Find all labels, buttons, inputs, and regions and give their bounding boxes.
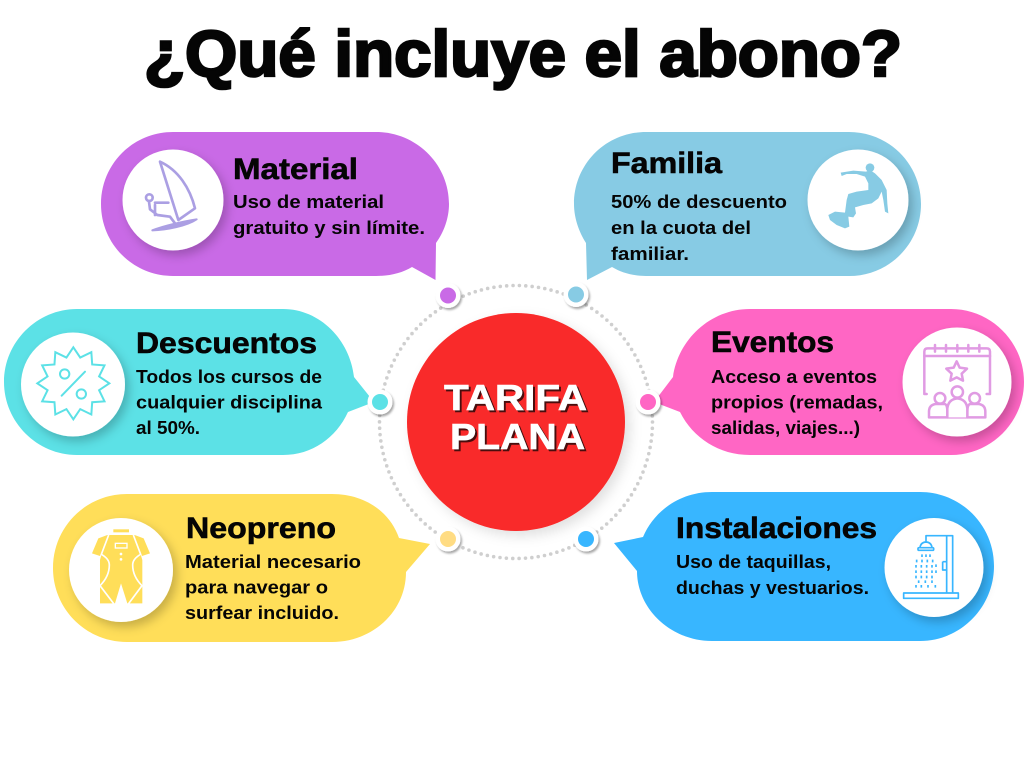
text: familia description: familiar. [611,244,689,264]
central label: PLANA [450,416,585,457]
panel: familia [574,132,921,280]
text: neopreno description: Material necesario [185,552,361,572]
icon: calendar and people [902,328,1012,436]
heading: neopreno: Neopreno [186,512,336,545]
text: eventos description: Acceso a eventos [711,367,877,387]
text: material description: gratuito y sin límite. [233,218,425,238]
heading: familia: Familia [611,147,722,180]
panel: instalaciones [614,492,994,641]
text: eventos description [711,367,883,438]
bubble: material [101,132,449,280]
text: familia description: 50% de descuento [611,192,787,212]
bubble: neopreno [53,494,430,642]
text: instalaciones description [676,552,869,598]
heading: instalaciones: Instalaciones [676,512,877,545]
central circle: tarifa plana [407,313,625,531]
heading: eventos: Eventos [711,326,834,359]
icon: surfer [808,150,908,250]
icon: wetsuit [69,518,173,622]
icon: windsurfer [122,150,224,250]
text: material description: Uso de material [233,192,384,212]
panel: eventos [654,309,1024,455]
dotted ring [380,286,652,558]
central label: TARIFA [444,377,587,418]
bubble: instalaciones [614,492,994,641]
connector dot: eventos [636,390,660,414]
text: eventos description: salidas, viajes...) [711,418,860,438]
bubble: familia [574,132,921,280]
text: descuentos description: cualquier disciplina [136,392,323,412]
heading: descuentos: Descuentos [136,327,317,360]
text: neopreno description: surfear incluido. [185,603,339,623]
central label [444,377,587,457]
text: eventos description: propios (remadas, [711,392,883,412]
text: familia description [611,192,787,264]
panel: neopreno [53,494,430,642]
title: ¿Qué incluye el abono? [144,17,902,90]
connector dot: familia [564,282,588,307]
text: neopreno description: para navegar o [185,578,328,598]
text: neopreno description [185,552,361,623]
text: descuentos description: al 50%. [136,418,200,438]
panel: material [101,132,449,280]
heading: material: Material [233,153,358,186]
connector dot: neopreno [436,526,460,552]
icon: discount badge [21,332,125,436]
panel: descuentos [4,309,374,455]
bubble: descuentos [4,309,374,455]
text: familia description: en la cuota del [611,218,751,238]
connector dot: instalaciones [574,526,598,552]
text: material description [233,192,425,238]
text: instalaciones description: duchas y vestuarios. [676,578,869,598]
connector dot: descuentos [368,390,392,414]
connector dot: material [436,283,460,308]
icon: shower [884,518,984,617]
text: descuentos description: Todos los cursos de [136,367,322,387]
text: descuentos description [136,367,323,438]
text: instalaciones description: Uso de taquillas, [676,552,831,572]
bubble: eventos [654,309,1024,455]
